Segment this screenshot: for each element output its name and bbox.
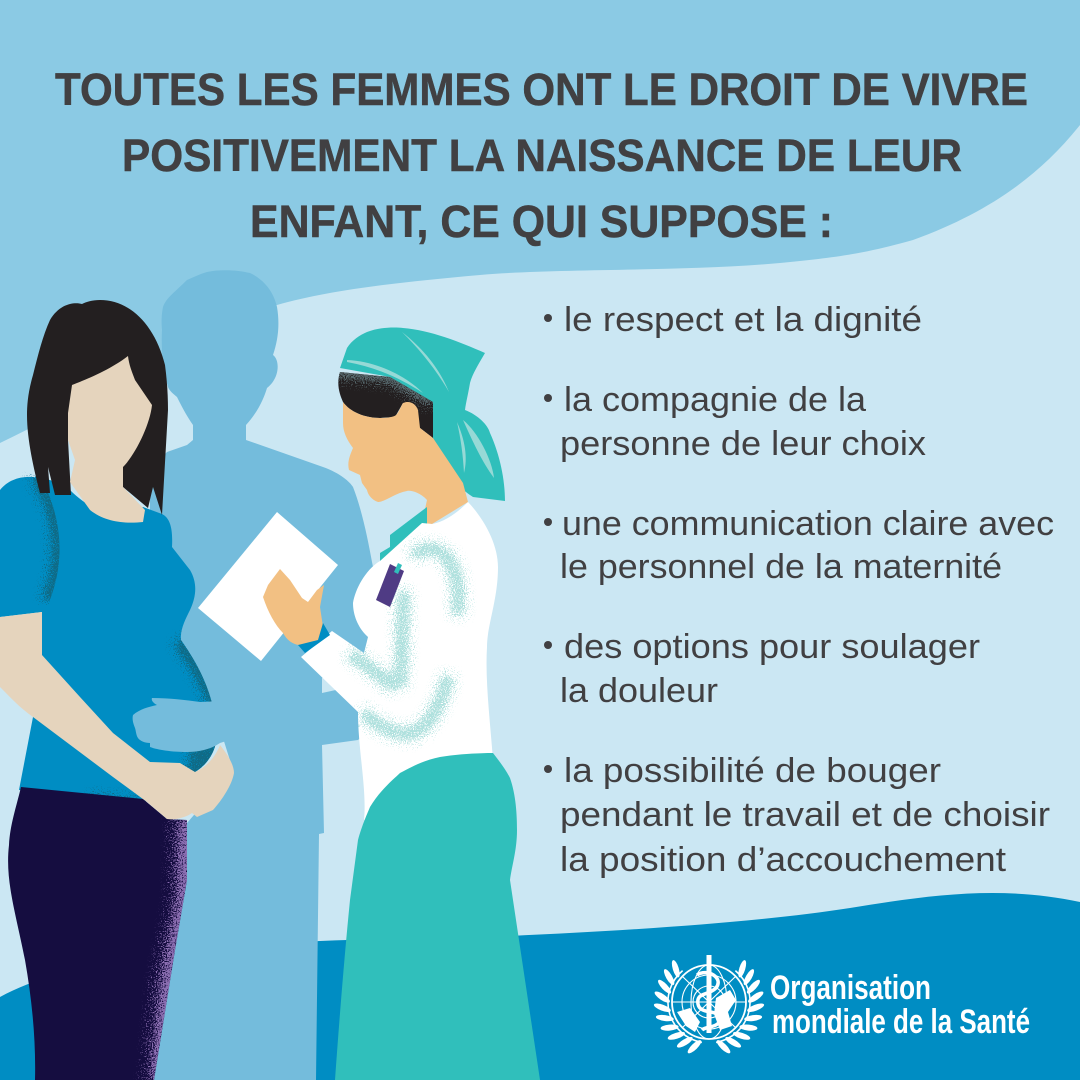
bullet 4	[544, 628, 980, 710]
title: POSITIVEMENT LA NAISSANCE DE LEUR	[122, 130, 962, 181]
bullet 5	[544, 752, 1050, 879]
man's hand on belly	[133, 698, 245, 752]
bullet 4: des options pour soulager	[564, 628, 980, 666]
figure: nurse	[198, 327, 540, 1080]
bottom wave	[0, 893, 1080, 1080]
nurse hand	[263, 569, 324, 645]
bullet 1: le respect et la dignité	[564, 301, 922, 339]
bullet 5: la possibilité de bouger	[564, 752, 941, 790]
bullet 3	[544, 505, 1054, 586]
title	[55, 64, 1028, 247]
bullet 3: le personnel de la maternité	[560, 548, 1002, 586]
woman's hair	[27, 300, 168, 515]
nurse hair	[338, 372, 433, 438]
nurse headscarf	[340, 327, 505, 501]
bullet 5: pendant le travail et de choisir	[560, 796, 1050, 834]
bullet 2: personne de leur choix	[560, 425, 926, 463]
figure: shadow man	[150, 270, 400, 1080]
bullet list	[544, 301, 1054, 879]
woman's arm and hands	[0, 612, 234, 819]
WHO name	[770, 969, 1030, 1041]
top wave	[0, 0, 1080, 443]
nurse collar	[380, 507, 427, 561]
clipboard paper	[198, 512, 338, 661]
nurse skirt	[335, 753, 540, 1080]
id badge	[376, 563, 404, 607]
woman's blue top	[0, 476, 230, 808]
bullet 2: la compagnie de la	[564, 381, 866, 419]
bullet 4: la douleur	[560, 672, 718, 710]
title: TOUTES LES FEMMES ONT LE DROIT DE VIVRE	[55, 64, 1028, 115]
nurse white coat	[301, 502, 498, 820]
bullet 5: la position d’accouchement	[560, 841, 1007, 879]
bullet 3: une communication claire avec	[562, 505, 1054, 543]
figure: pregnant woman	[0, 300, 230, 1080]
WHO logo	[653, 955, 1030, 1055]
bullet 2	[544, 381, 926, 463]
woman's face and neck	[68, 356, 152, 523]
title: ENFANT, CE QUI SUPPOSE :	[250, 196, 833, 247]
WHO emblem	[653, 955, 765, 1055]
WHO name: Organisation	[770, 969, 931, 1007]
woman's trousers	[8, 787, 187, 1080]
light gap under nurse arm	[322, 670, 345, 693]
nurse blue cuff	[298, 623, 330, 653]
nurse face and neck	[343, 402, 468, 524]
